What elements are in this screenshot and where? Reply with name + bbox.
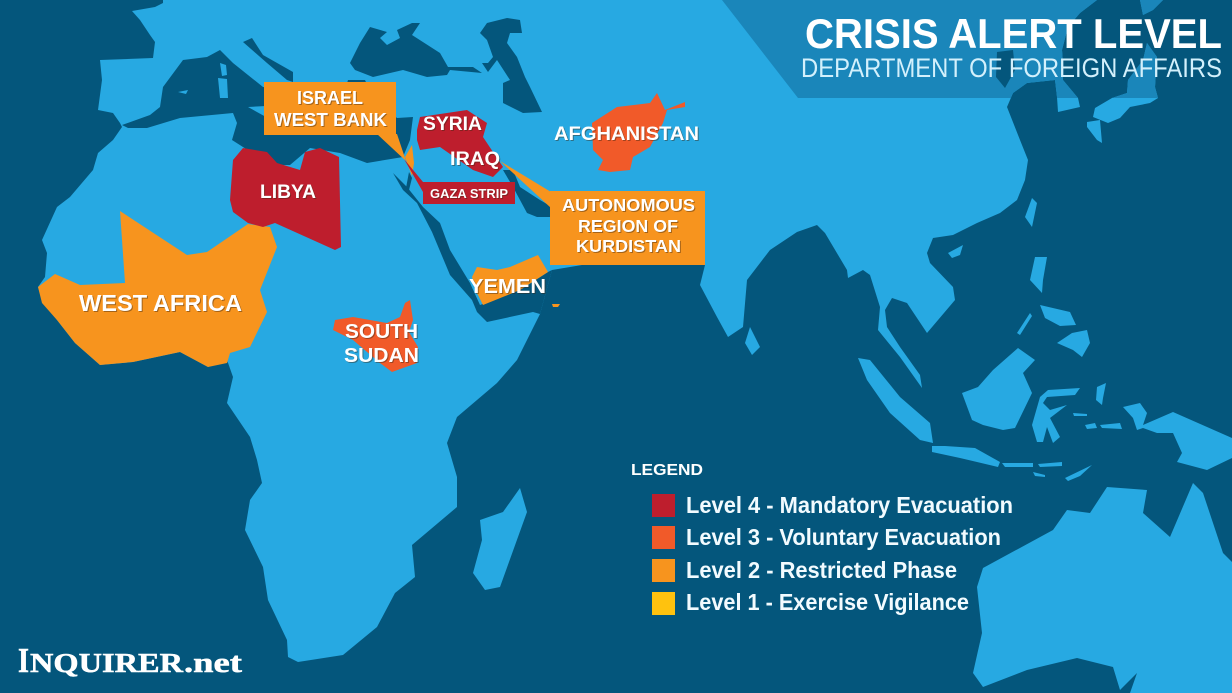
land: New Guinea (1123, 403, 1232, 470)
label: Sudan: SUDAN (344, 345, 419, 367)
sea: Gulf of Suez (406, 172, 412, 190)
country: West Africa (38, 211, 277, 367)
land: Borneo (962, 348, 1035, 430)
islands in the Mediterranean (178, 63, 266, 117)
sea: Persian Gulf (503, 170, 552, 217)
legend item: level 3: Level 3 - Voluntary Evacuation (686, 524, 1001, 550)
land: Sumatra (858, 358, 933, 443)
sea: Mediterranean (122, 50, 413, 165)
callout pointer: Israel West Bank (377, 134, 406, 161)
callouts (264, 82, 705, 265)
country: Yemen (472, 255, 560, 307)
country: Afghanistan (592, 93, 685, 172)
label: West Bank: WEST BANK (274, 110, 387, 130)
callout box: Kurdistan (550, 191, 705, 265)
land: Philippines (1017, 257, 1090, 357)
label: Israel: ISRAEL (297, 88, 363, 108)
land: Australia (973, 483, 1232, 693)
country labels (79, 88, 699, 367)
callout pointer: Kurdistan (500, 161, 551, 208)
heading: CRISIS ALERT LEVEL (805, 10, 1222, 57)
label: Gaza Strip: GAZA STRIP (430, 187, 508, 201)
callout pointer: Gaza Strip (404, 159, 423, 192)
sea: Bohai (996, 50, 1015, 88)
logo: Inquirer.net: I (18, 641, 29, 680)
label: South: SOUTH (345, 321, 418, 343)
legend (631, 462, 1013, 615)
title panel (722, 0, 1162, 98)
label: Autonomous: AUTONOMOUS (562, 195, 695, 215)
sea: Black Sea (350, 23, 482, 77)
logo: Inquirer.net: .net (184, 647, 242, 679)
label: Syria: SYRIA (423, 114, 482, 135)
country: South Sudan (333, 300, 418, 372)
label: Iraq: IRAQ (450, 149, 500, 170)
land: Sulawesi (1032, 388, 1080, 443)
legend item: level 1: Level 1 - Exercise Vigilance (686, 589, 969, 615)
land: Java and Lesser Sunda (932, 446, 1092, 481)
label: Region of: REGION OF (578, 216, 678, 236)
island: Balearic (178, 90, 188, 94)
island: Corsica and Sardinia (218, 63, 228, 98)
land: Taiwan (1025, 198, 1037, 227)
country: Syria and Iraq (417, 110, 503, 177)
seas (122, 18, 1015, 322)
legend item: level 2: Level 2 - Restricted Phase (686, 557, 957, 583)
callout box: Gaza Strip (423, 182, 515, 204)
countries (38, 93, 685, 372)
legend heading: LEGEND (631, 462, 703, 479)
label: West Africa: WEST AFRICA (79, 290, 242, 316)
sea: Red Sea and Gulf of Aden (393, 173, 552, 322)
country: Libya (230, 148, 341, 250)
island: Sicily (248, 106, 266, 117)
legend item: level 4: Level 4 - Mandatory Evacuation (686, 492, 1013, 518)
callout box: Israel West Bank (264, 82, 396, 135)
land: Hainan (948, 245, 963, 258)
land: Japan (1087, 0, 1163, 143)
land: Moluccas (1073, 383, 1122, 429)
logo: Inquirer.net: NQUIRER (30, 648, 184, 678)
label: Yemen: YEMEN (469, 276, 546, 298)
sea: Adriatic (243, 38, 293, 82)
label: Libya: LIBYA (260, 182, 316, 203)
title block (801, 10, 1222, 83)
land: Sri Lanka (745, 327, 760, 355)
label: Afghanistan: AFGHANISTAN (554, 124, 699, 145)
country: Israel and West Bank (405, 145, 414, 176)
sea: Caspian (480, 18, 542, 113)
land: Madagascar (473, 488, 527, 590)
label: Kurdistan: KURDISTAN (576, 236, 681, 256)
logo: Inquirer.net (18, 641, 242, 680)
